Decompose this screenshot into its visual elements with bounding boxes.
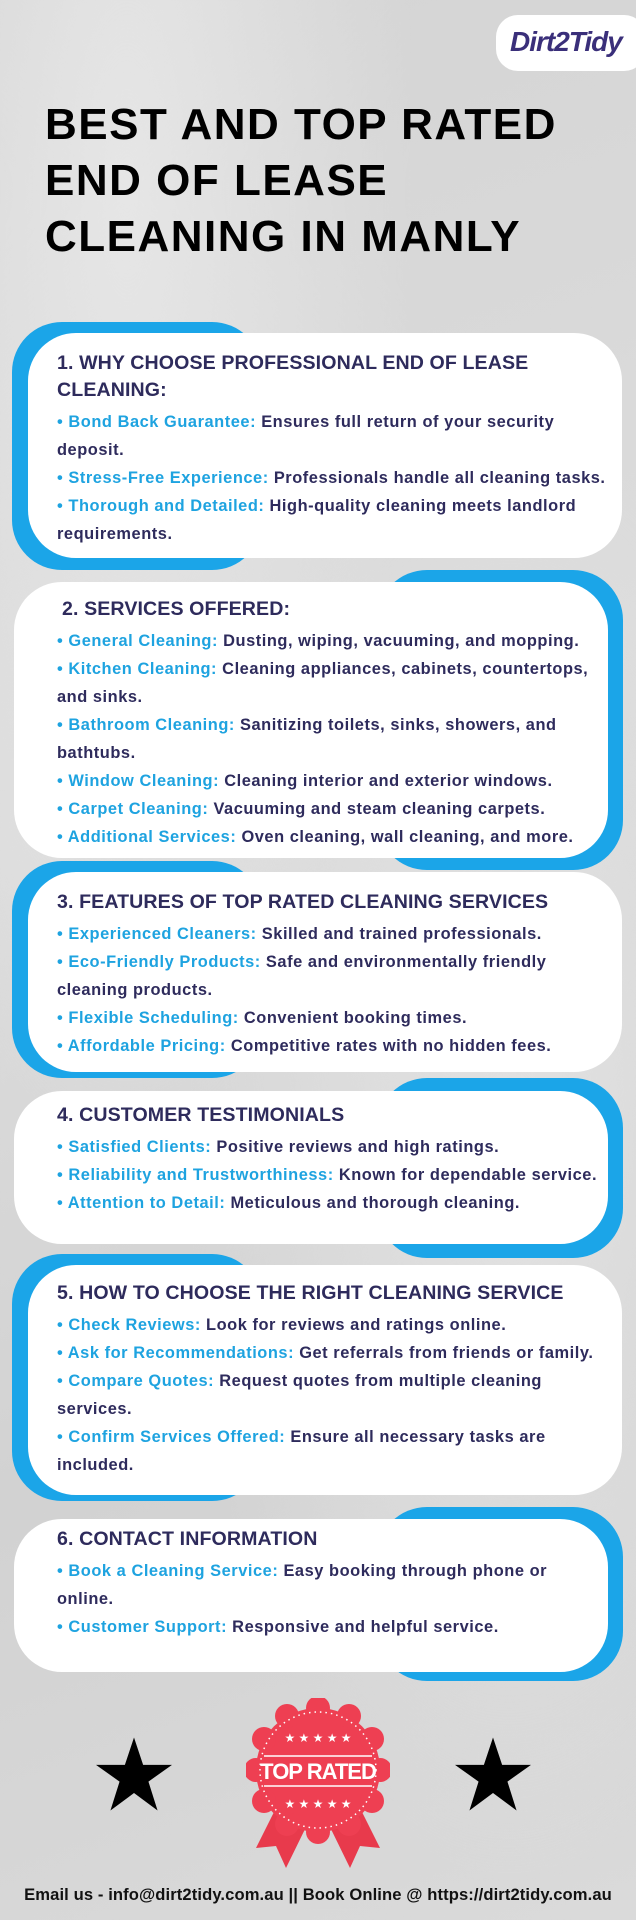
logo: Dirt2Tidy — [510, 26, 622, 57]
bullets 6: • Customer Support: Responsive and helpful service. — [57, 1618, 499, 1636]
bullets 4: • Attention to Detail: Meticulous and thorough cleaning. — [57, 1194, 520, 1212]
heading 2: 2. SERVICES OFFERED: — [62, 598, 290, 620]
badge: top rated: ★ ★ ★ ★ ★ — [284, 1731, 352, 1745]
badge: top rated — [246, 1698, 390, 1868]
bullets 3: • Experienced Cleaners: Skilled and trained professionals. — [57, 925, 542, 943]
bullets 2: • Window Cleaning: Cleaning interior and exterior windows. — [57, 772, 553, 790]
panel 1 — [12, 322, 622, 570]
heading 1: 1. WHY CHOOSE PROFESSIONAL END OF LEASE CLEANING: — [57, 352, 528, 401]
footer text: Email us - info@dirt2tidy.com.au || Book Online @ https://dirt2tidy.com.au — [24, 1885, 612, 1904]
bullets 2: • Bathroom Cleaning: Sanitizing toilets, sinks, showers, and bathtubs. — [57, 716, 557, 762]
bullets 1 — [57, 413, 606, 543]
bullets 4: • Satisfied Clients: Positive reviews and high ratings. — [57, 1138, 499, 1156]
panel 4 — [14, 1078, 623, 1258]
title: BEST AND TOP RATED — [45, 100, 557, 149]
bullets 6 — [57, 1562, 547, 1636]
panel 6 — [14, 1507, 623, 1681]
badge: top rated: TOP RATED — [260, 1759, 376, 1784]
bullets 3: • Affordable Pricing: Competitive rates with no hidden fees. — [57, 1037, 551, 1055]
bullets 4: • Reliability and Trustworthiness: Known for dependable service. — [57, 1166, 597, 1184]
panel 2 — [14, 570, 623, 870]
bullets 1: • Stress-Free Experience: Professionals handle all cleaning tasks. — [57, 469, 606, 487]
heading 4: 4. CUSTOMER TESTIMONIALS — [57, 1104, 344, 1126]
badge: top rated: ★ ★ ★ ★ ★ — [284, 1797, 352, 1811]
bullets 3 — [57, 925, 551, 1055]
icon: right star — [455, 1738, 531, 1810]
bullets 3: • Flexible Scheduling: Convenient booking times. — [57, 1009, 467, 1027]
bullets 5: • Confirm Services Offered: Ensure all necessary tasks are included. — [57, 1428, 546, 1474]
icon: left star — [96, 1738, 172, 1810]
logo — [496, 15, 636, 71]
bullets 6: • Book a Cleaning Service: Easy booking through phone or online. — [57, 1562, 547, 1608]
heading 5: 5. HOW TO CHOOSE THE RIGHT CLEANING SERVICE — [57, 1282, 564, 1304]
panel 3 — [12, 861, 622, 1078]
bullets 5: • Ask for Recommendations: Get referrals from friends or family. — [57, 1344, 593, 1362]
bullets 5: • Compare Quotes: Request quotes from multiple cleaning services. — [57, 1372, 542, 1418]
bullets 2: • Additional Services: Oven cleaning, wall cleaning, and more. — [57, 828, 574, 846]
bullets 2: • Kitchen Cleaning: Cleaning appliances, cabinets, countertops, and sinks. — [57, 660, 588, 706]
title: CLEANING IN MANLY — [45, 212, 521, 261]
bullets 3: • Eco-Friendly Products: Safe and environmentally friendly cleaning products. — [57, 953, 546, 999]
bullets 1: • Thorough and Detailed: High-quality cleaning meets landlord requirements. — [57, 497, 576, 543]
title — [45, 100, 557, 261]
bullets 2 — [57, 632, 588, 846]
bullets 2: • General Cleaning: Dusting, wiping, vacuuming, and mopping. — [57, 632, 579, 650]
heading 6: 6. CONTACT INFORMATION — [57, 1528, 318, 1550]
panel 5 — [12, 1254, 622, 1501]
bullets 1: • Bond Back Guarantee: Ensures full return of your security deposit. — [57, 413, 554, 459]
title: END OF LEASE — [45, 156, 388, 205]
bullets 5: • Check Reviews: Look for reviews and ratings online. — [57, 1316, 506, 1334]
heading 3: 3. FEATURES OF TOP RATED CLEANING SERVICES — [57, 891, 548, 913]
bullets 5 — [57, 1316, 593, 1474]
bullets 2: • Carpet Cleaning: Vacuuming and steam cleaning carpets. — [57, 800, 545, 818]
bullets 4 — [57, 1138, 597, 1212]
